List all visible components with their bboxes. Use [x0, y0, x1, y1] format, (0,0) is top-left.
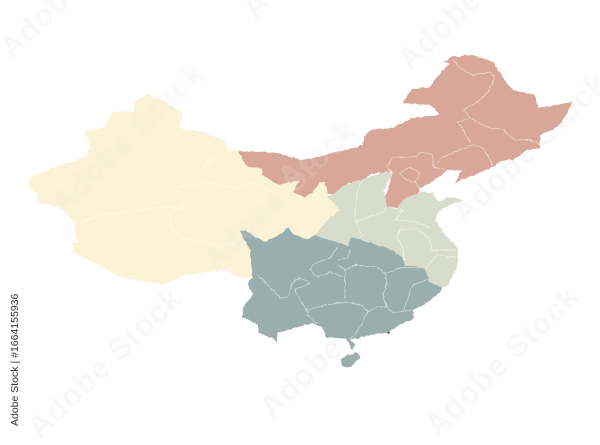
watermark text on map: Adobe Stock: [44, 56, 212, 220]
faint watermarks on white background: Adobe Stock: [21, 281, 189, 445]
island: Hainan: [340, 353, 360, 367]
region: north (red): [238, 55, 572, 208]
faint watermarks on white background: Adobe Stock: [418, 279, 586, 443]
region: west (yellow): [28, 94, 340, 285]
watermark text on map: [44, 31, 439, 277]
watermark shadows on yellow region: [44, 56, 364, 277]
stock image ID label: Adobe Stock | #1664155936: [9, 294, 21, 426]
faint watermarks on white background: Adobe Stock: [253, 261, 421, 425]
watermark text on map: Adobe Stock: [196, 113, 364, 277]
region: central east (green): [315, 171, 463, 288]
marker: Hong Kong: [387, 331, 390, 334]
map regions: [28, 55, 572, 367]
watermark shadows on yellow region: Adobe Stock: [44, 56, 212, 220]
watermarks over map: [44, 31, 439, 277]
region: south (blue-grey): [240, 227, 443, 367]
watermark shadows on yellow region: Adobe Stock: [196, 113, 364, 277]
watermark text on map: Adobe Stock: [271, 31, 439, 195]
